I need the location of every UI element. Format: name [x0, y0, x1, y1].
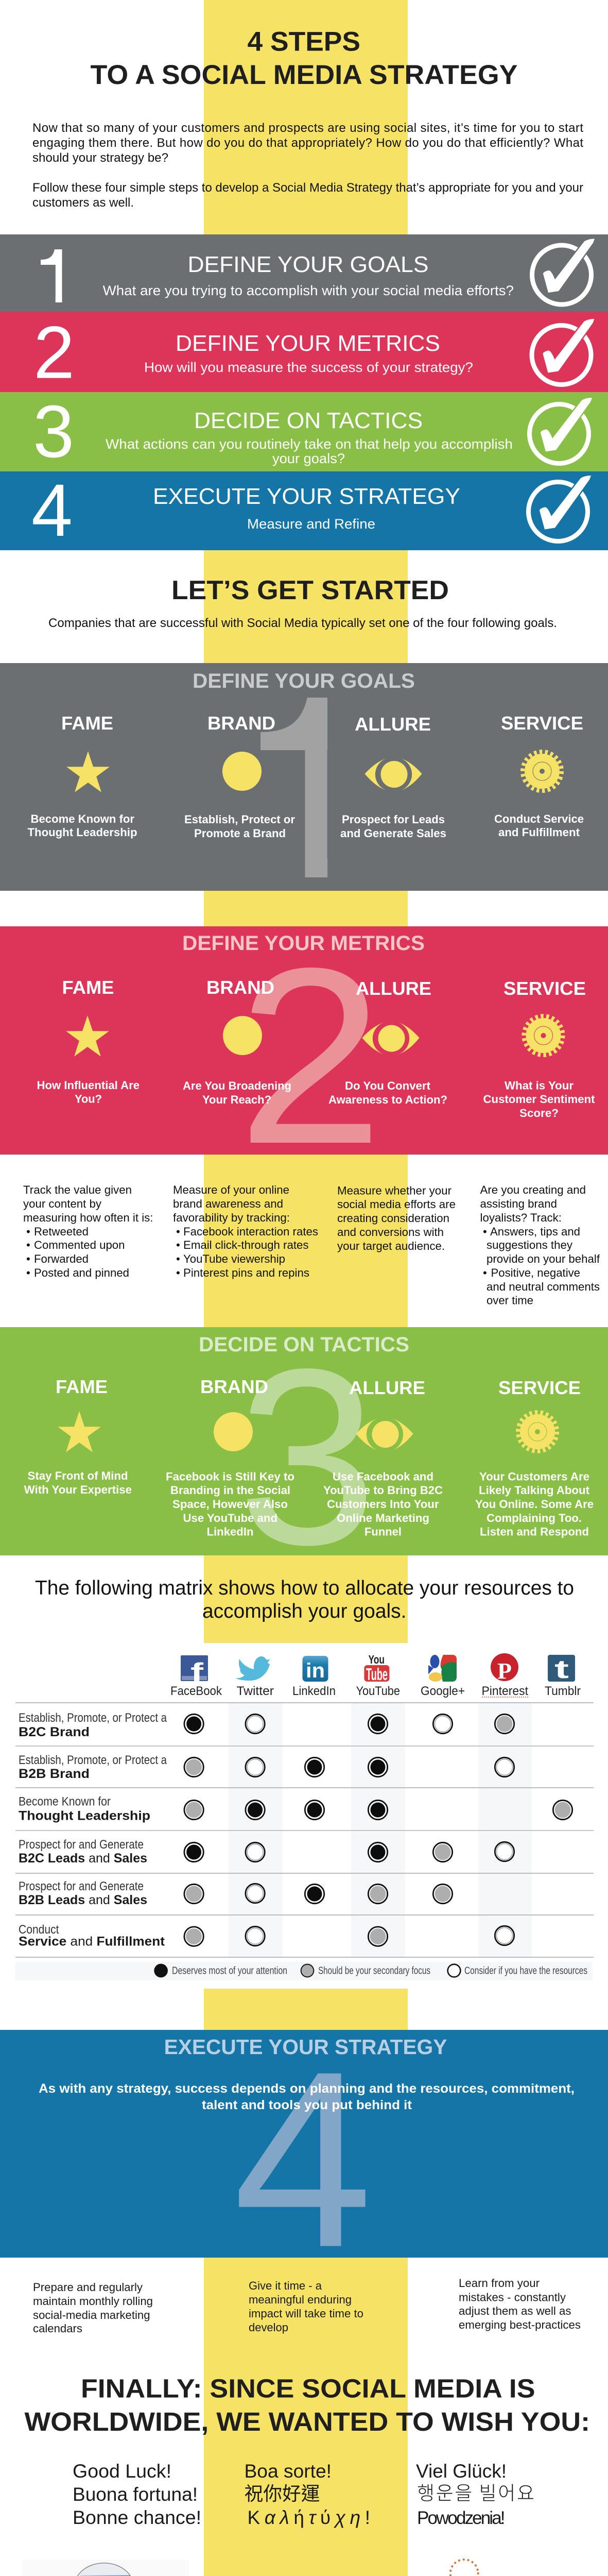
text column: allure metrics [337, 1184, 456, 1252]
panel: execute your strategy: talent and tools you put behind it [202, 2098, 412, 2112]
matrix row: B2B brand: B2B Brand [19, 1767, 90, 1781]
icon: youtube: Tube [366, 1665, 388, 1684]
text column: learn from mistakes: Learn from your [459, 2277, 540, 2290]
column: allure: Awareness to Action? [328, 1093, 447, 1106]
icon: twitter [235, 1656, 270, 1681]
column: brand: Facebook is Still Key to [166, 1470, 294, 1483]
column: allure: and Generate Sales [340, 827, 446, 840]
column: service: SERVICE [501, 713, 583, 734]
intro text: should your strategy be? [32, 151, 168, 165]
column: allure: Online Marketing [337, 1512, 429, 1524]
panel: step 2 band: 2 [33, 311, 75, 394]
text column: brand metrics: favorability by tracking: [173, 1211, 290, 1224]
title: 4 STEPS [247, 27, 360, 57]
text column: fame metrics: your content by [23, 1197, 102, 1210]
heading: finally: FINALLY: SINCE SOCIAL MEDIA IS [81, 2374, 535, 2403]
panel: step 4 band: Measure and Refine [247, 516, 375, 532]
panel: step 2 band [0, 311, 608, 394]
text column: fame metrics: Posted and pinned [34, 1266, 129, 1279]
icon: linkedin: in [306, 1659, 325, 1682]
icon: google plus [428, 1655, 457, 1682]
column: allure: Use Facebook and [333, 1470, 433, 1483]
column: service [483, 978, 595, 1120]
panel: decide on tactics [0, 1317, 608, 1597]
big number 4: 4 [233, 2020, 373, 2300]
greetings column 1: Buona fortuna! [73, 2484, 198, 2505]
matrix intro text [35, 1577, 574, 1622]
text column: give it time: impact will take time to [249, 2307, 363, 2320]
text column: give it time: Give it time - a [249, 2279, 322, 2292]
text column: brand metrics: brand awareness and [173, 1197, 283, 1210]
column: fame: FAME [61, 713, 113, 734]
text column: fame metrics [23, 1183, 153, 1279]
matrix legend: Deserves most of your attention [172, 1965, 287, 1976]
column: allure [323, 1377, 443, 1538]
icon: pinterest: P [497, 1658, 512, 1684]
column: service [475, 1377, 594, 1538]
intro text: Now that so many of your customers and prospects are using social sites, it’s time for you to start [32, 121, 583, 135]
text column: learn from mistakes: mistakes - constantly [459, 2291, 566, 2304]
text column: prepare [33, 2281, 153, 2335]
matrix row: service and fulfillment: Conduct [19, 1923, 59, 1937]
big number 3: 3 [238, 1317, 377, 1597]
greetings column 1 [73, 2461, 201, 2528]
text column: learn from mistakes: emerging best-practices [459, 2318, 581, 2331]
matrix row: B2C brand: Establish, Promote, or Protect a [19, 1711, 167, 1725]
icon: linkedin [303, 1656, 328, 1682]
column: brand: LinkedIn [207, 1526, 253, 1538]
column labels: Twitter [237, 1684, 274, 1698]
column: fame: Thought Leadership [28, 826, 137, 839]
icon: check mark 1 [532, 239, 595, 304]
matrix row: B2B leads and sales [19, 1879, 453, 1907]
column: service: Complaining Too. [487, 1512, 582, 1524]
column: service: SERVICE [498, 1377, 581, 1398]
column: fame: Become Known for [31, 812, 134, 825]
text column: service metrics: over time [487, 1294, 533, 1307]
heading: let's get started: Companies that are successful with Social Media typically set one of the four following goals. [48, 616, 557, 630]
column: brand: Branding in the Social [170, 1484, 290, 1497]
icon: tumblr: t [554, 1655, 569, 1684]
text column: brand metrics: • [176, 1252, 180, 1265]
intro text: customers as well. [32, 196, 134, 210]
column: allure: Do You Convert [345, 1079, 431, 1092]
matrix row: B2C leads and sales: Prospect for and Generate [19, 1838, 144, 1852]
matrix legend: Should be your secondary focus [318, 1965, 430, 1976]
text column: fame metrics: Retweeted [34, 1225, 89, 1238]
column: allure [328, 978, 447, 1106]
icon: pinterest [491, 1653, 518, 1684]
column labels [170, 1684, 581, 1698]
icon: tumblr [548, 1655, 575, 1684]
panel: step 1 band: What are you trying to accomplish with your social media efforts? [103, 283, 514, 298]
text column: allure metrics: social media efforts are [337, 1198, 456, 1211]
panel: define your metrics: DEFINE YOUR METRICS [182, 932, 425, 955]
matrix row: B2C brand [19, 1711, 514, 1739]
matrix legend [15, 1962, 593, 1980]
matrix row: B2C leads and sales: B2C Leads and Sales [19, 1851, 147, 1866]
text column: brand metrics: Pinterest pins and repins [183, 1266, 309, 1279]
panel: step 4 band: EXECUTE YOUR STRATEGY [153, 484, 460, 509]
text column: brand metrics: Email click-through rates [183, 1239, 309, 1251]
title: TO A SOCIAL MEDIA STRATEGY [91, 60, 518, 90]
panel: step 3 band: 3 [33, 390, 74, 473]
matrix row: B2C brand: B2C Brand [19, 1725, 90, 1739]
column labels: Pinterest [482, 1684, 528, 1698]
column: allure: Customers Into Your [327, 1498, 439, 1511]
text column: prepare: social-media marketing [33, 2309, 150, 2321]
column: fame [28, 713, 137, 839]
heading: let's get started: LET’S GET STARTED [171, 575, 449, 605]
column labels: Tumblr [545, 1684, 581, 1698]
text column: brand metrics: • [176, 1239, 180, 1251]
heading: let's get started [48, 575, 557, 630]
text column: allure metrics: creating consideration [337, 1212, 449, 1225]
greetings column 3 [416, 2461, 534, 2528]
column: service: Conduct Service [494, 812, 584, 825]
panel: execute your strategy: EXECUTE YOUR STRATEGY [164, 2035, 447, 2059]
column: service: You Online. Some Are [475, 1498, 594, 1511]
panel: step 2 band: How will you measure the success of your strategy? [144, 360, 473, 375]
column: allure: ALLURE [349, 1377, 425, 1398]
column: brand: BRAND [200, 1376, 268, 1397]
column: service: SERVICE [503, 978, 586, 999]
matrix row: service and fulfillment [19, 1923, 514, 1948]
intro text [32, 121, 583, 210]
text column: service metrics: • [483, 1266, 487, 1279]
greetings column 3: Powodzenia! [417, 2508, 506, 2528]
text column: give it time: meaningful enduring [249, 2293, 352, 2306]
column: brand: BRAND [206, 977, 274, 998]
panel: step 3 band: DECIDE ON TACTICS [194, 408, 423, 433]
text column: give it time [249, 2279, 363, 2334]
text column: prepare: Prepare and regularly [33, 2281, 143, 2294]
panel: step 4 band [0, 469, 608, 552]
title [91, 27, 518, 90]
logo: big think [22, 2560, 189, 2576]
matrix row: thought leadership [19, 1795, 572, 1823]
column: brand [184, 713, 295, 840]
column: allure [340, 714, 446, 840]
matrix intro text: The following matrix shows how to allocate your resources to [35, 1577, 574, 1599]
column: fame: FAME [56, 1376, 108, 1397]
text column: brand metrics: YouTube viewership [183, 1252, 285, 1265]
icon: check mark 4 [528, 476, 591, 541]
greetings column 2: Καλήτύχη! [247, 2507, 370, 2528]
big number 1 [260, 698, 327, 877]
column: brand: Your Reach? [202, 1093, 271, 1106]
text column: service metrics: and neutral comments [487, 1280, 600, 1293]
column: brand: BRAND [207, 713, 275, 734]
matrix intro text: accomplish your goals. [202, 1600, 407, 1622]
column labels: LinkedIn [292, 1684, 336, 1698]
text column: brand metrics: • [176, 1266, 180, 1279]
panel: step 2 band: DEFINE YOUR METRICS [176, 331, 440, 356]
column: brand: Promote a Brand [194, 827, 286, 840]
matrix row: B2B leads and sales: Prospect for and Generate [19, 1879, 144, 1893]
column: service: Score? [519, 1107, 559, 1120]
greetings column 3: 행운을 빌어요 [417, 2478, 534, 2505]
text column: brand metrics: Facebook interaction rates [183, 1225, 318, 1238]
column: fame: You? [75, 1093, 102, 1106]
icon: check mark 3 [529, 398, 592, 464]
column: brand: Use YouTube and [183, 1512, 277, 1524]
column: brand [183, 977, 291, 1106]
text column: learn from mistakes [459, 2277, 581, 2331]
chart: resource allocation matrix [15, 1653, 594, 1980]
column labels: YouTube [356, 1684, 400, 1698]
column: fame: How Influential Are [37, 1079, 140, 1092]
text column: fame metrics: Track the value given [23, 1183, 132, 1196]
panel: step 3 band: your goals? [272, 451, 345, 466]
logo: number 8 communications [450, 2560, 571, 2576]
text column: fame metrics: • [26, 1252, 30, 1265]
column: fame: With Your Expertise [24, 1483, 132, 1496]
big number 1: 1 [242, 651, 381, 931]
panel: decide on tactics: DECIDE ON TACTICS [199, 1333, 409, 1356]
icon: youtube [364, 1653, 389, 1684]
greetings column 3: Viel Glück! [416, 2461, 507, 2482]
text column: service metrics: loyalists? Track: [480, 1211, 562, 1224]
column: brand: Are You Broadening [183, 1079, 291, 1092]
column labels: Google+ [421, 1684, 465, 1698]
column: allure: YouTube to Bring B2C [323, 1484, 443, 1497]
column: service: and Fulfillment [498, 826, 580, 839]
text column: learn from mistakes: adjust them as well as [459, 2304, 571, 2317]
greetings column 1: Bonne chance! [73, 2507, 201, 2528]
text column: service metrics: suggestions they [487, 1239, 573, 1251]
heading: finally [25, 2374, 590, 2436]
column: service: Likely Talking About [479, 1484, 590, 1497]
intro text: Follow these four simple steps to develop a Social Media Strategy that’s appropriate for you and your [32, 181, 583, 195]
matrix row: service and fulfillment: Service and Fulfillment [19, 1934, 165, 1948]
icon: facebook [181, 1655, 208, 1687]
column: brand: Space, However Also [172, 1498, 288, 1511]
panel: step 1 band [0, 234, 608, 318]
text column: brand metrics: Measure of your online [173, 1183, 289, 1196]
intro text: engaging them there. But how do you do that appropriately? How do you do that efficiently? What [32, 136, 583, 150]
matrix row: B2B leads and sales: B2B Leads and Sales [19, 1893, 147, 1907]
column: fame [37, 977, 140, 1106]
panel: define your goals [0, 663, 608, 891]
heading: finally: WORLDWIDE, WE WANTED TO WISH YOU: [25, 2407, 590, 2436]
icon: facebook: f [190, 1658, 204, 1687]
text column: allure metrics: and conversions with [337, 1226, 444, 1239]
text column: prepare: calendars [33, 2322, 82, 2335]
text column: fame metrics: Forwarded [34, 1252, 89, 1265]
panel: step 1 band: 1 [37, 235, 78, 318]
panel: define your metrics [0, 916, 608, 1196]
text column: give it time: develop [249, 2321, 288, 2334]
panel: step 4 band: 4 [31, 469, 73, 552]
matrix row: thought leadership: Become Known for [19, 1795, 111, 1808]
column: service: Your Customers Are [479, 1470, 589, 1483]
matrix row: B2C leads and sales [19, 1838, 514, 1866]
matrix row: thought leadership: Thought Leadership [19, 1808, 150, 1823]
column labels: FaceBook [170, 1684, 222, 1698]
text column: fame metrics: • [26, 1239, 30, 1251]
column: service: Customer Sentiment [483, 1093, 595, 1106]
big number 2: 2 [237, 916, 384, 1196]
column: fame [24, 1376, 132, 1496]
greetings column 1: Good Luck! [73, 2461, 171, 2482]
text column: fame metrics: measuring how often it is: [23, 1211, 153, 1224]
column: allure: Funnel [364, 1526, 402, 1538]
text column: fame metrics: • [26, 1225, 30, 1238]
column: allure: ALLURE [356, 978, 431, 999]
column: fame: Stay Front of Mind [28, 1469, 128, 1482]
panel: execute your strategy: As with any strategy, success depends on planning and the resources, commitment, [39, 2081, 575, 2096]
matrix row: B2B brand [19, 1753, 514, 1781]
text column: fame metrics: Commented upon [34, 1239, 125, 1251]
text column: allure metrics: your target audience. [337, 1240, 445, 1252]
text column: service metrics: • [483, 1225, 487, 1238]
text column: service metrics [480, 1183, 600, 1307]
text column: brand metrics: • [176, 1225, 180, 1238]
text column: allure metrics: Measure whether your [337, 1184, 452, 1197]
panel: step 1 band: DEFINE YOUR GOALS [187, 252, 428, 277]
text column: fame metrics: • [26, 1266, 30, 1279]
column: fame: FAME [62, 977, 114, 998]
text column: service metrics: assisting brand [480, 1197, 557, 1210]
column: service: Listen and Respond [480, 1526, 589, 1538]
panel: execute your strategy [0, 2020, 608, 2300]
text column: service metrics: provide on your behalf [487, 1252, 600, 1265]
matrix row: B2B brand: Establish, Promote, or Protect a [19, 1753, 167, 1767]
column: allure: ALLURE [355, 714, 431, 735]
column: brand: Establish, Protect or [184, 813, 295, 826]
column: brand [166, 1376, 294, 1538]
panel: step 3 band: What actions can you routinely take on that help you accomplish [106, 436, 513, 452]
greetings column 2 [244, 2461, 370, 2528]
icon: check mark 2 [532, 319, 594, 384]
column: service: What is Your [505, 1079, 574, 1092]
panel: define your goals: DEFINE YOUR GOALS [193, 670, 415, 692]
greetings column 2: Boa sorte! [244, 2461, 332, 2482]
text column: service metrics: Answers, tips and [490, 1225, 580, 1238]
icon: youtube: You [369, 1653, 385, 1666]
column: service [494, 713, 584, 839]
greetings column 2: 祝你好運 [244, 2478, 320, 2506]
text column: service metrics: Are you creating and [480, 1183, 586, 1196]
text column: prepare: maintain monthly rolling [33, 2295, 153, 2308]
text column: brand metrics [173, 1183, 318, 1279]
panel: step 3 band [0, 390, 608, 473]
column: allure: Prospect for Leads [342, 813, 445, 826]
text column: service metrics: Positive, negative [491, 1266, 580, 1279]
